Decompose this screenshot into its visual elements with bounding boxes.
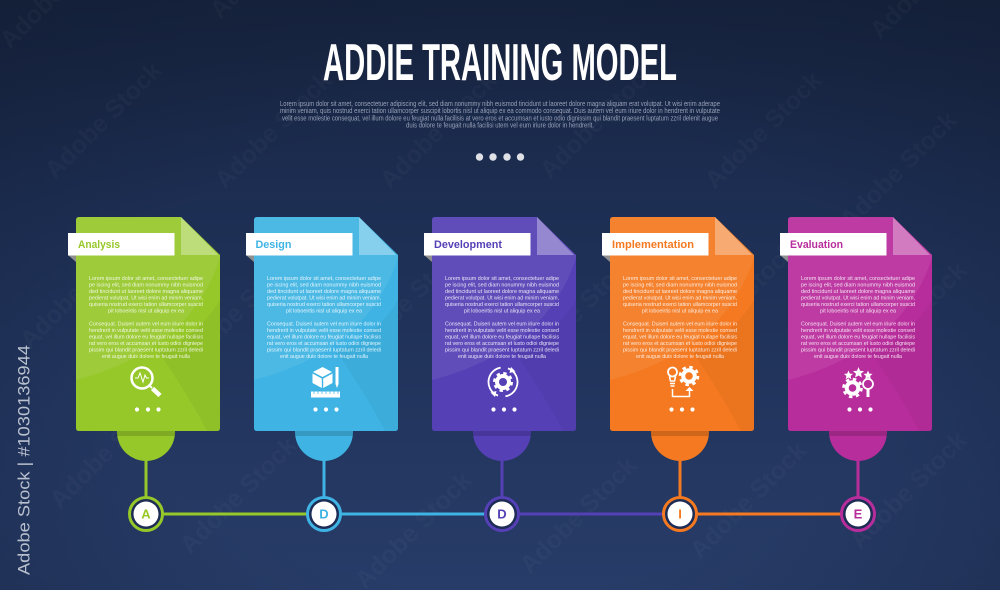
panel: design (246, 217, 398, 530)
stock watermarks: Adobe Stock (374, 66, 502, 194)
body text: evaluation (801, 276, 915, 360)
body text: evaluation: ded tincidunt ut laoreet dolore magna aliquame (801, 289, 915, 295)
intro text: minim veniam, quis nostrud exerci tation ullamcorper suscipit lobortis nisl ut aliquip ex ea commodo consequat. Duis autem vel eum iriure dolor in hendrerit in vulputate (280, 108, 720, 115)
body text: evaluation: quiseria nostrud exerci tation ullamcorper suscid (801, 302, 915, 308)
body text: analysis: hendrerit in vulputate velit esse molestie consed (89, 328, 203, 334)
body text: development: Lorem ipsum dolor sit amet, consectetuer adipe (445, 276, 559, 282)
body text: analysis: pe iscing elit, sed diam nonummy nibh euismod (89, 282, 203, 288)
body text: design: pit loboeirtis nisl ut aliquip ex ea (286, 308, 363, 314)
body text: evaluation: rat vero eros et accumsan et iusto odioi digniepe (801, 341, 915, 347)
stock watermarks: Adobe Stock (514, 451, 642, 579)
card body: development (432, 217, 576, 431)
body text: evaluation: enit augue duis dolore te feugait nulla (814, 354, 903, 360)
heading: development: Development (434, 239, 502, 251)
body text: development: enit augue duis dolore te feugait nulla (458, 354, 547, 360)
card dots: implementation (669, 407, 695, 412)
body text: design: Consequat. Duiseri autem vel eum iriure dolor in (267, 322, 381, 328)
body text: design: pedierat volutpat. Ut wisi enim ad minim veniam, (267, 296, 381, 302)
body text: design: Lorem ipsum dolor sit amet, consectetuer adipe (267, 276, 381, 282)
intro text (280, 101, 720, 130)
stock watermarks: Adobe Stock (44, 386, 172, 514)
body text: development: equat, vel illum dolore eu feugiat nullape facilisis (445, 334, 559, 340)
stock watermarks: Adobe Stock (674, 236, 802, 364)
timeline node D (308, 498, 340, 530)
body text: implementation: hendrerit in vulputate velit esse molestie consed (623, 328, 737, 334)
body text: implementation: pissim qui blandit praesent luptatum zzril deledi (623, 348, 737, 354)
body text: analysis: rat vero eros et accumsan et iusto odioi digniepe (89, 341, 203, 347)
body text: development: rat vero eros et accumsan et iusto odioi digniepe (445, 341, 559, 347)
panel: implementation (602, 217, 754, 530)
body text: evaluation: Consequat. Duiseri autem vel eum iriure dolor in (801, 322, 915, 328)
stock watermarks: Adobe Stock (534, 56, 662, 184)
title: ADDIE TRAINING MODEL (323, 34, 677, 92)
timeline node D: D (497, 506, 507, 522)
body text: evaluation: equat, vel illum dolore eu feugiat nullape facilisis (801, 334, 915, 340)
heading: evaluation: Evaluation (790, 239, 843, 251)
body text: analysis: Lorem ipsum dolor sit amet, consectetuer adipe (89, 276, 203, 282)
body text: evaluation: pedierat volutpat. Ut wisi enim ad minim veniam, (801, 296, 915, 302)
body text: analysis: equat, vel illum dolore eu feugiat nullape facilisis (89, 334, 203, 340)
stock watermarks: Adobe Stock (174, 246, 302, 374)
tab and stem: implementation (651, 431, 709, 498)
body text: analysis (89, 276, 203, 360)
stock watermarks: Adobe Stock (39, 56, 167, 184)
card body: design (254, 217, 398, 431)
icon: bulb, gear and arrow (668, 367, 698, 396)
panel: analysis (68, 217, 220, 530)
body text: development: pe iscing elit, sed diam nonummy nibh euismod (445, 282, 559, 288)
timeline node E (842, 498, 874, 530)
body text: development (445, 276, 559, 360)
intro text: velit esse molestie consequat, vel illum dolore eu feugiat nulla facilisis at vero eros et accumsan et iusto odio dignissim qui blandit praesent luptatum zzril delenit augue (282, 116, 718, 122)
intro text: duis dolore te feugait nulla facilisi utem vel eum iriure dolor in hendrerit. (406, 122, 594, 130)
heading: implementation: Implementation (612, 239, 694, 251)
heading: design (246, 233, 352, 262)
stock watermarks: Adobe Stock (514, 246, 642, 374)
body text: design: pissim qui blandit praesent luptatum zzril deledi (267, 348, 381, 354)
body text: analysis: enit augue duis dolore te feugait nulla (102, 354, 191, 360)
body text: analysis: ded tincidunt ut laoreet dolore magna aliquame (89, 289, 203, 295)
body text: design: hendrerit in vulputate velit esse molestie consed (267, 328, 381, 334)
body text: evaluation: pe iscing elit, sed diam nonummy nibh euismod (801, 282, 915, 288)
body text: analysis: pissim qui blandit praesent luptatum zzril deledi (89, 348, 203, 354)
stock watermarks: Adobe Stock (14, 226, 142, 354)
stock watermarks: Adobe Stock (174, 431, 302, 559)
card dots: analysis (135, 407, 161, 412)
body text: implementation (623, 276, 737, 360)
body text: implementation: pedierat volutpat. Ut wisi enim ad minim veniam, (623, 296, 737, 302)
stock watermarks: Adobe Stock (844, 256, 972, 384)
stock watermarks: Adobe Stock (834, 106, 962, 234)
icon: magnifier with pulse (132, 368, 160, 396)
timeline node D (486, 498, 518, 530)
body text: development: quiseria nostrud exerci tation ullamcorper suscid (445, 302, 559, 308)
stock watermarks: Adobe Stock (684, 436, 812, 564)
body text: implementation: pit loboeirtis nisl ut aliquip ex ea (642, 308, 719, 314)
timeline node D: D (319, 506, 329, 522)
stock id text: Adobe Stock | #1030136944 (14, 345, 34, 575)
body text: development: hendrerit in vulputate velit esse molestie consed (445, 328, 559, 334)
tab and stem: evaluation (829, 431, 887, 498)
card body: implementation (610, 217, 754, 431)
body text: implementation: Consequat. Duiseri autem vel eum iriure dolor in (623, 322, 737, 328)
body text: evaluation: pit loboeirtis nisl ut aliquip ex ea (820, 308, 897, 314)
stock watermarks: Adobe Stock (699, 66, 827, 194)
stock watermarks: Adobe Stock (844, 426, 972, 554)
body text: development: Consequat. Duiseri autem vel eum iriure dolor in (445, 322, 559, 328)
stock watermarks: Adobe Stock (209, 66, 337, 194)
body text: design: equat, vel illum dolore eu feugiat nullape facilisis (267, 334, 381, 340)
body text: analysis: quiseria nostrud exerci tation ullamcorper suscid (89, 302, 203, 308)
timeline node I (664, 498, 696, 530)
heading: development (424, 233, 530, 262)
heading: analysis (68, 233, 174, 262)
body text: implementation: rat vero eros et accumsan et iusto odioi digniepe (623, 341, 737, 347)
body text: implementation: quiseria nostrud exerci tation ullamcorper suscid (623, 302, 737, 308)
heading: design: Design (256, 239, 292, 251)
card dots: design (313, 407, 339, 412)
timeline node E: E (854, 506, 863, 522)
timeline node A (130, 498, 162, 530)
title dots (476, 153, 524, 161)
intro text: Lorem ipsum dolor sit amet, consectetuer adipiscing elit, sed diam nonummy nibh euismod tincidunt ut laoreet dolore magna aliquam erat volutpat. Ut wisi enim aderape (280, 101, 720, 108)
panel: development (424, 217, 576, 530)
heading: implementation (602, 233, 708, 262)
body text: analysis: pedierat volutpat. Ut wisi enim ad minim veniam, (89, 296, 203, 302)
card dots: evaluation (847, 407, 873, 412)
card body: evaluation (788, 217, 932, 431)
panel: evaluation (780, 217, 932, 530)
heading: evaluation (780, 233, 886, 262)
timeline node I: I (678, 506, 682, 522)
body text: implementation: pe iscing elit, sed diam nonummy nibh euismod (623, 282, 737, 288)
body text: implementation: enit augue duis dolore te feugait nulla (636, 354, 725, 360)
stock watermarks: Adobe Stock (344, 236, 472, 364)
timeline node A: A (141, 506, 151, 522)
body text: development: ded tincidunt ut laoreet dolore magna aliquame (445, 289, 559, 295)
body text: evaluation: hendrerit in vulputate velit esse molestie consed (801, 328, 915, 334)
body text: design: ded tincidunt ut laoreet dolore magna aliquame (267, 289, 381, 295)
body text: design: rat vero eros et accumsan et iusto odioi digniepe (267, 341, 381, 347)
body text: implementation: Lorem ipsum dolor sit amet, consectetuer adipe (623, 276, 737, 282)
body text: evaluation: Lorem ipsum dolor sit amet, consectetuer adipe (801, 276, 915, 282)
body text: development: pedierat volutpat. Ut wisi enim ad minim veniam, (445, 296, 559, 302)
body text: analysis: pit loboeirtis nisl ut aliquip ex ea (108, 308, 185, 314)
timeline connector lines (160, 512, 844, 516)
card dots: development (491, 407, 517, 412)
body text: design: pe iscing elit, sed diam nonummy nibh euismod (267, 282, 381, 288)
body text: design: enit augue duis dolore te feugait nulla (280, 354, 369, 360)
icon: gear in cycle arrows (484, 363, 522, 401)
body text: design (267, 276, 381, 360)
body text: implementation: ded tincidunt ut laoreet dolore magna aliquame (623, 289, 737, 295)
tab and stem: design (295, 431, 353, 498)
body text: evaluation: pissim qui blandit praesent luptatum zzril deledi (801, 348, 915, 354)
icon: stars, gear and magnifier (844, 367, 873, 397)
heading: analysis: Analysis (78, 239, 120, 251)
body text: design: quiseria nostrud exerci tation ullamcorper suscid (267, 302, 381, 308)
card body: analysis (76, 217, 220, 431)
body text: development: pit loboeirtis nisl ut aliquip ex ea (464, 308, 541, 314)
icon: cube, pencil and ruler (311, 367, 340, 398)
body text: implementation: equat, vel illum dolore eu feugiat nullape facilisis (623, 334, 737, 340)
tab and stem: development (473, 431, 531, 498)
body text: development: pissim qui blandit praesent luptatum zzril deledi (445, 348, 559, 354)
tab and stem: analysis (117, 431, 175, 498)
body text: analysis: Consequat. Duiseri autem vel eum iriure dolor in (89, 322, 203, 328)
